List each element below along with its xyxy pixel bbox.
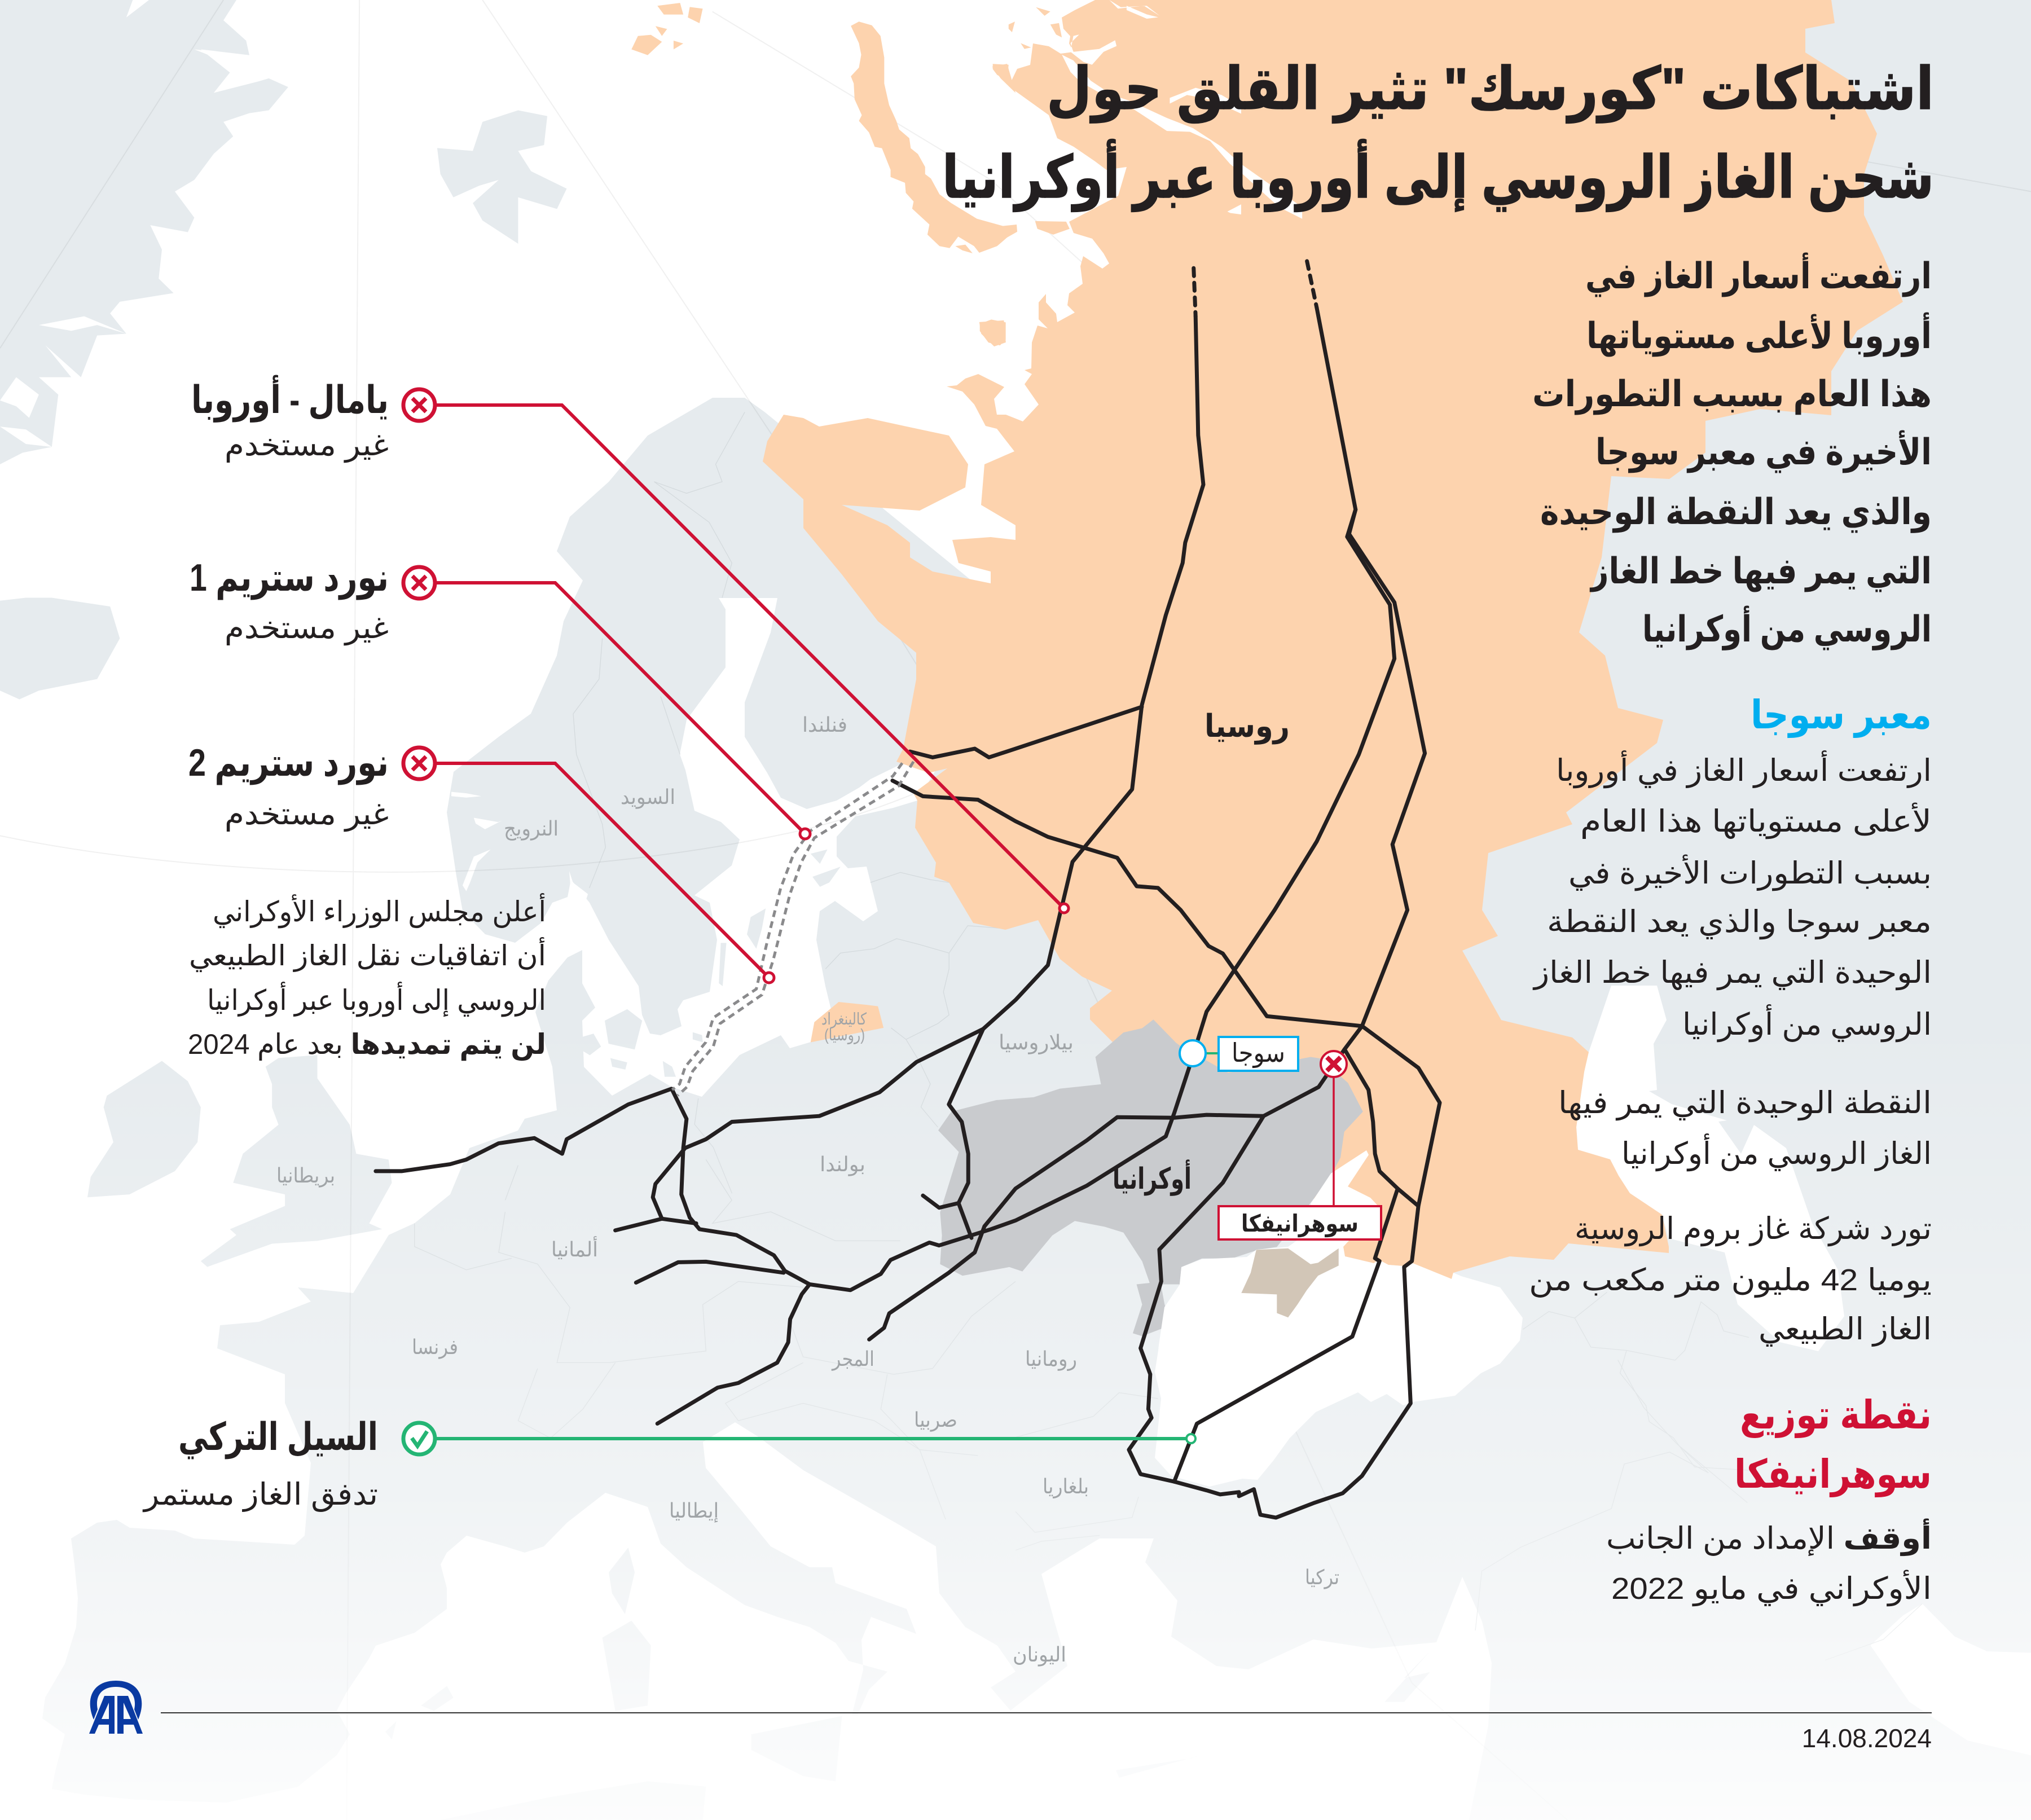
country labels: ألمانيا xyxy=(551,1236,598,1261)
country labels: كالينغراد xyxy=(821,1010,867,1028)
label: Yamal-Europe: غير مستخدم xyxy=(225,428,389,463)
country labels: فنلندا xyxy=(802,713,847,736)
Sudzha description: الوحيدة التي يمر فيها خط الغاز xyxy=(1532,956,1932,990)
label: Nord Stream 2: غير مستخدم xyxy=(225,797,389,832)
gas pipelines network xyxy=(376,261,1440,1518)
Sudzha marker and label: سوجا xyxy=(1232,1038,1285,1069)
callout line: TurkStream xyxy=(437,1434,1195,1443)
country labels: بريطانيا xyxy=(276,1164,335,1188)
Novaya Zemlya and Arctic islands xyxy=(851,7,1070,345)
label: Nord Stream 1 xyxy=(190,556,389,645)
transit point note: الغاز الروسي من أوكرانيا xyxy=(1621,1133,1932,1171)
Sudzha description xyxy=(1532,750,1932,1042)
label: Yamal-Europe: يامال - أوروبا xyxy=(191,375,389,423)
intro paragraph: والذي يعد النقطة الوحيدة xyxy=(1540,491,1932,533)
label: Nord Stream 2 xyxy=(188,741,389,832)
Sudzha description: لأعلى مستوياتها هذا العام xyxy=(1580,802,1932,839)
icon: Yamal closed xyxy=(403,389,435,421)
Sudzha description: بسبب التطورات الأخيرة في xyxy=(1568,854,1932,891)
callout line: Nord Stream 2 xyxy=(437,763,774,983)
country labels: أوكرانيا xyxy=(1113,1159,1192,1196)
Gazprom supply note: تورد شركة غاز بروم الروسية xyxy=(1575,1212,1932,1246)
Ukraine territory xyxy=(938,1019,1363,1336)
label: TurkStream: تدفق الغاز مستمر xyxy=(142,1478,378,1513)
Caspian Sea xyxy=(1576,986,1844,1351)
Russia territory xyxy=(631,0,1903,1279)
Sokhranivka heading xyxy=(1734,1393,1932,1497)
Sudzha description: معبر سوجا والذي يعد النقطة xyxy=(1547,905,1932,939)
note: Ukrainian cabinet statement: لن يتم تمديدها بعد عام 2024 xyxy=(188,1028,546,1061)
country labels: فرنسا xyxy=(412,1335,458,1359)
label: Nord Stream 1: غير مستخدم xyxy=(225,611,389,645)
transit point note: النقطة الوحيدة التي يمر فيها xyxy=(1558,1086,1932,1120)
intro paragraph: التي يمر فيها خط الغاز xyxy=(1589,551,1932,592)
title: اشتباكات "كورسك" تثير القلق حول xyxy=(1047,56,1934,124)
Sokhranivka description xyxy=(1606,1518,1932,1606)
Sokhranivka marker and label: سوهرانيفكا xyxy=(1241,1210,1359,1238)
Kaliningrad territory xyxy=(811,1002,883,1042)
Arctic inlets xyxy=(1062,0,1302,219)
country labels: إيطاليا xyxy=(669,1499,719,1523)
Gazprom supply note: الغاز الطبيعي xyxy=(1759,1312,1932,1347)
intro paragraph: ارتفعت أسعار الغاز في xyxy=(1585,252,1932,297)
Sokhranivka heading: سوهرانيفكا xyxy=(1734,1452,1932,1497)
Sudzha description: ارتفعت أسعار الغاز في أوروبا xyxy=(1556,750,1932,788)
Gazprom supply note: يوميا 42 مليون متر مكعب من xyxy=(1529,1263,1932,1298)
land: North Africa xyxy=(441,1781,706,1820)
note: Ukrainian cabinet statement: أعلن مجلس الوزراء الأوكراني xyxy=(213,893,546,929)
Persian Gulf xyxy=(1870,1604,2031,1755)
intro paragraph: أوروبا لأعلى مستوياتها xyxy=(1586,312,1932,357)
note: Ukrainian cabinet statement: أن اتفاقيات نقل الغاز الطبيعي xyxy=(189,937,546,972)
country labels: بولندا xyxy=(820,1153,865,1176)
intro paragraph: هذا العام بسبب التطورات xyxy=(1532,373,1932,415)
country labels: النرويج xyxy=(504,817,559,841)
logo: Anadolu Agency xyxy=(89,1681,143,1734)
transit point note xyxy=(1558,1086,1932,1171)
country labels xyxy=(276,708,1339,1667)
note: Ukrainian cabinet statement: الروسي إلى أوروبا عبر أوكرانيا xyxy=(207,982,546,1017)
bottom fade xyxy=(0,1015,2031,1820)
label: Nord Stream 1: نورد ستريم 1 xyxy=(190,556,389,600)
icon: TurkStream active xyxy=(403,1423,435,1454)
country labels: (روسيا) xyxy=(824,1026,865,1044)
Sokhranivka marker and label xyxy=(1219,1051,1381,1239)
Sokhranivka description: الأوكراني في مايو 2022 xyxy=(1611,1570,1932,1606)
callout line: Nord Stream 1 xyxy=(437,583,810,839)
date: 14.08.2024 xyxy=(1802,1724,1932,1753)
country labels: المجر xyxy=(831,1347,874,1371)
country labels: بيلاروسيا xyxy=(999,1031,1074,1054)
Sokhranivka heading: نقطة توزيع xyxy=(1740,1393,1932,1438)
label: Nord Stream 2: نورد ستريم 2 xyxy=(188,741,389,785)
country labels: اليونان xyxy=(1013,1643,1066,1667)
callout line: Yamal-Europe xyxy=(437,405,1069,913)
Black Sea and Sea of Azov xyxy=(1155,1150,1523,1487)
Sudzha marker and label xyxy=(1180,1037,1298,1071)
Gazprom supply note xyxy=(1529,1212,1932,1347)
country labels: رومانيا xyxy=(1025,1347,1077,1371)
icon: Nord Stream 1 closed xyxy=(403,567,435,599)
Sudzha heading: معبر سوجا xyxy=(1751,693,1932,738)
intro paragraph xyxy=(1532,252,1932,650)
footer rule xyxy=(161,1712,1932,1713)
land: Scandinavia xyxy=(447,398,971,1035)
Norwegian fjords xyxy=(451,792,588,900)
note: Ukrainian cabinet statement xyxy=(188,893,546,1061)
label: Yamal-Europe xyxy=(191,375,389,463)
land: Ireland and Britain xyxy=(87,1055,392,1267)
Crimea xyxy=(1241,1248,1339,1317)
Sokhranivka description: أوقف الإمداد من الجانب xyxy=(1606,1518,1932,1556)
Greenland fjords xyxy=(0,0,246,447)
title xyxy=(942,56,1934,212)
label: TurkStream xyxy=(142,1415,378,1513)
country labels: بلغاريا xyxy=(1043,1475,1089,1498)
country labels: السويد xyxy=(621,785,675,809)
Nord Stream dashed pipelines xyxy=(672,762,913,1096)
intro paragraph: الروسي من أوكرانيا xyxy=(1642,605,1932,650)
intro paragraph: الأخيرة في معبر سوجا xyxy=(1595,430,1932,473)
country labels: تركيا xyxy=(1305,1566,1339,1589)
country labels: روسيا xyxy=(1204,708,1290,745)
icon: Nord Stream 2 closed xyxy=(403,748,435,779)
country labels: صربيا xyxy=(914,1408,957,1432)
label: TurkStream: السيل التركي xyxy=(178,1415,378,1459)
Sudzha description: الروسي من أوكرانيا xyxy=(1682,1004,1932,1042)
